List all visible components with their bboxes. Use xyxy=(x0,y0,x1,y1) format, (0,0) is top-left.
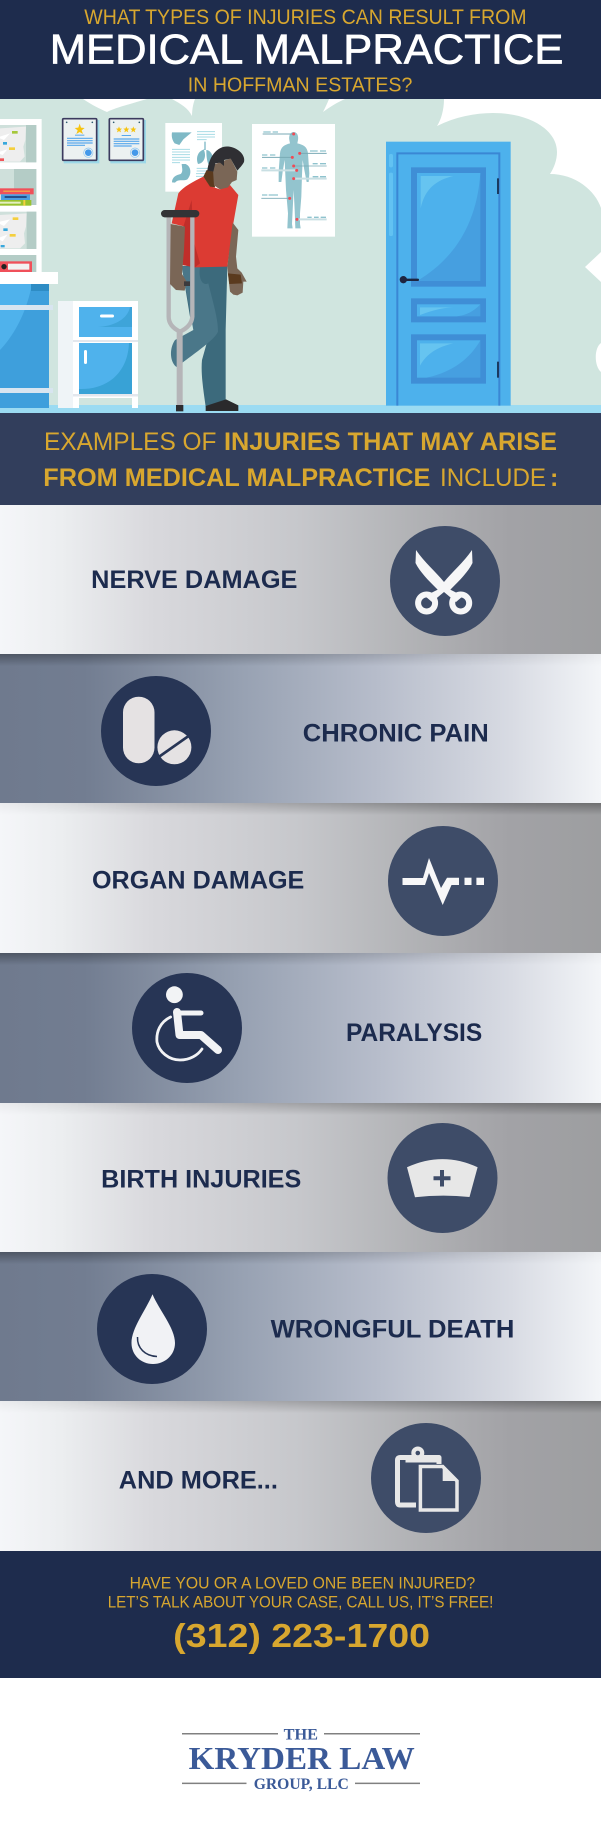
row: nerve damage xyxy=(0,505,601,654)
row: chronic pain: CHRONIC PAIN xyxy=(303,719,489,747)
row: birth injuries xyxy=(0,1103,601,1252)
footer: call to action xyxy=(0,1551,601,1678)
row: wrongful death: WRONGFUL DEATH xyxy=(271,1316,514,1344)
crutch pad xyxy=(161,210,199,217)
crutch frame xyxy=(169,217,192,332)
man on crutch xyxy=(161,146,247,411)
neck xyxy=(203,170,215,187)
call to action line two: LET’S TALK ABOUT YOUR CASE, CALL US, IT’S FREE! xyxy=(108,1592,493,1611)
logo: the kryder law group xyxy=(182,1726,420,1793)
background cloud shape xyxy=(0,99,601,406)
small white cabinet xyxy=(58,301,138,408)
header line three: IN HOFFMAN ESTATES? xyxy=(188,73,412,96)
band: examples heading xyxy=(0,413,601,505)
door xyxy=(386,142,511,406)
main title: MEDICAL MALPRACTICE xyxy=(50,25,563,72)
band heading line two: FROM MEDICAL MALPRACTICE xyxy=(43,464,430,492)
logo: the kryder law group: GROUP, LLC xyxy=(254,1776,349,1793)
arms and hands xyxy=(170,224,187,291)
illustration: doctor's office scene xyxy=(0,99,601,413)
band heading line one xyxy=(44,428,557,456)
shirt xyxy=(172,177,238,267)
band heading line one: EXAMPLES OF xyxy=(44,428,216,456)
row: wrongful death xyxy=(0,1252,601,1401)
icon: wheelchair xyxy=(157,986,218,1060)
icon: scissors xyxy=(415,550,472,614)
band heading line two: INCLUDE xyxy=(440,464,546,492)
counter and large blue cabinet xyxy=(0,272,58,408)
row: birth injuries: BIRTH INJURIES xyxy=(101,1166,301,1194)
certificate one xyxy=(63,119,99,163)
header banner xyxy=(0,0,601,99)
logo: the kryder law group: THE xyxy=(284,1726,318,1743)
icon: heartbeat xyxy=(402,858,484,905)
row: paralysis: PARALYSIS xyxy=(346,1019,482,1047)
row: nerve damage: NERVE DAMAGE xyxy=(91,566,297,594)
certificate two xyxy=(109,119,146,163)
door panels xyxy=(411,167,486,287)
floor xyxy=(0,405,601,413)
poster: body diagram with injury points xyxy=(252,124,335,237)
row: organ damage xyxy=(0,803,601,953)
phone number: (312) 223-1700 xyxy=(173,1618,430,1655)
poster: organs xyxy=(165,123,222,192)
head xyxy=(213,158,237,189)
shoe xyxy=(206,399,238,411)
icon: pills xyxy=(123,697,191,764)
row: chronic pain xyxy=(0,654,601,803)
bookcase with files and books xyxy=(0,119,42,272)
row: and more xyxy=(0,1401,601,1551)
row: organ damage: ORGAN DAMAGE xyxy=(92,867,304,895)
icon: nurse cap xyxy=(407,1159,478,1197)
band heading line two: : xyxy=(550,464,558,492)
logo: the kryder law group: KRYDER LAW xyxy=(189,1741,415,1776)
call to action line one: HAVE YOU OR A LOVED ONE BEEN INJURED? xyxy=(130,1574,475,1593)
header line one: WHAT TYPES OF INJURIES CAN RESULT FROM xyxy=(84,5,527,29)
door handle xyxy=(400,276,407,283)
icon: clipboard and document xyxy=(398,1446,457,1510)
band heading line one: INJURIES THAT MAY ARISE xyxy=(224,428,557,456)
row: paralysis xyxy=(0,953,601,1103)
icon: blood drop xyxy=(132,1294,175,1364)
jeans xyxy=(182,266,227,407)
row: and more: AND MORE... xyxy=(119,1467,278,1495)
